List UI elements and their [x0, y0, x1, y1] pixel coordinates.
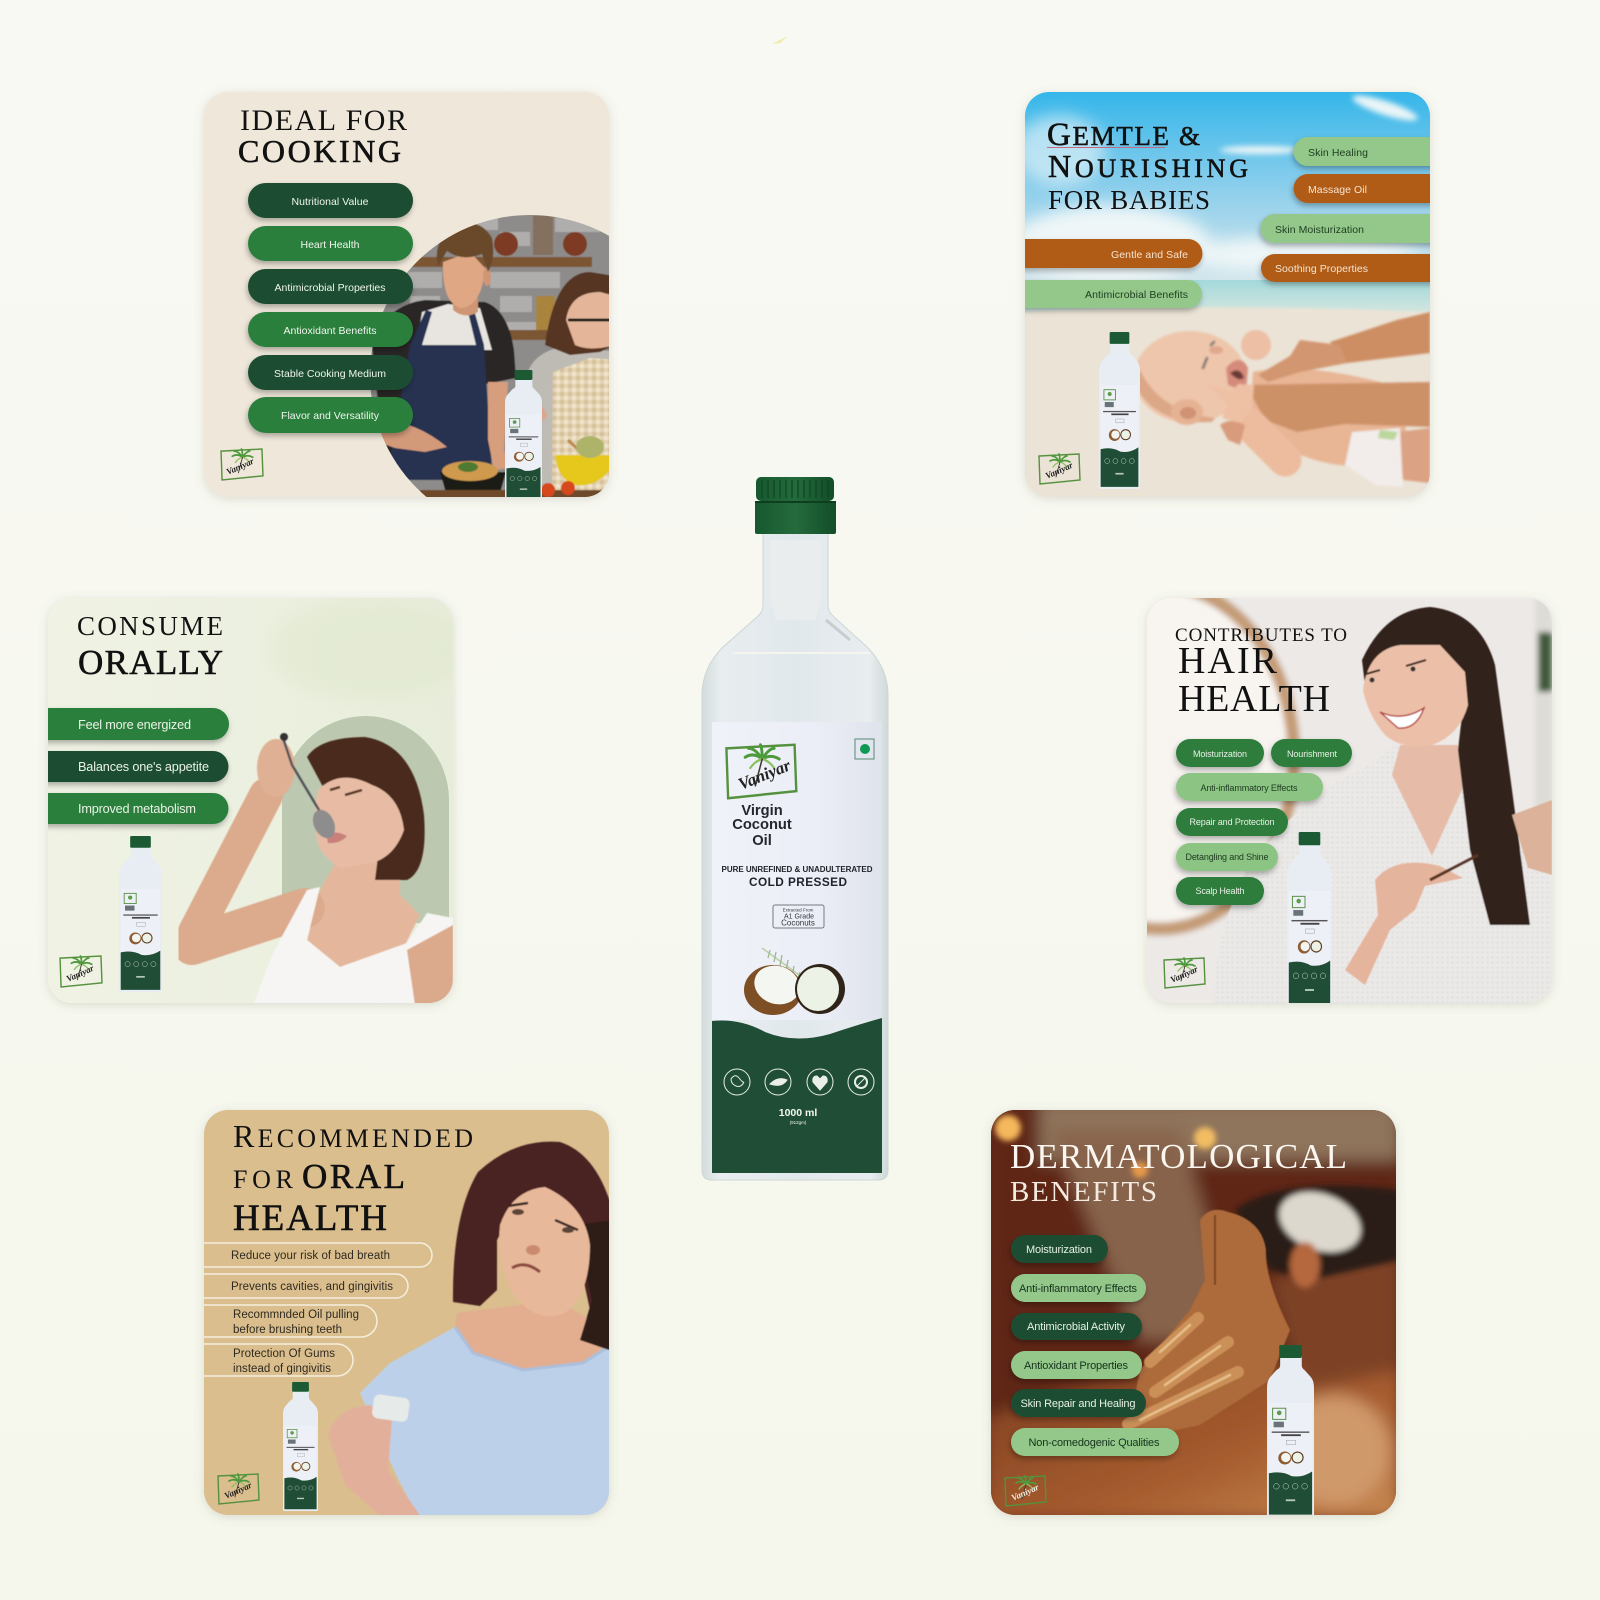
heading: HEALTH: [233, 1198, 387, 1239]
benefit pills: [38, 708, 229, 824]
panel: dermatological benefits: [985, 1100, 1405, 1520]
benefit pills: Stable Cooking Medium: [274, 368, 386, 380]
heading: [78, 617, 222, 674]
heading: HAIR: [1178, 640, 1278, 682]
panel: contributes to hair health: [1144, 597, 1555, 1008]
outlined benefit pills: [200, 1243, 432, 1376]
benefit pills: Soothing Properties: [1275, 263, 1368, 275]
panel: consume orally: [38, 598, 470, 1005]
heading: FOR: [233, 1165, 294, 1194]
benefit pills: Skin Moisturization: [1275, 224, 1364, 236]
heading: [1176, 628, 1346, 711]
logo: Vaniyar: [1169, 964, 1200, 985]
heading: [239, 110, 407, 162]
logo: Vaniyar: [223, 1480, 254, 1501]
benefit pills: Nourishment: [1287, 749, 1337, 759]
benefit pills: Anti-inflammatory Effects: [1200, 783, 1298, 793]
heading: HEALTH: [1178, 678, 1330, 720]
mini bottle: [1267, 1345, 1314, 1517]
heading: DERMATOLOGICAL: [1010, 1137, 1347, 1176]
bottle cap: [755, 477, 836, 534]
benefit pills: Detangling and Shine: [1186, 852, 1268, 862]
photo: woman combing hair: [1147, 598, 1552, 1003]
benefit pills: Scalp Health: [1196, 886, 1244, 896]
benefit pills: Antimicrobial Properties: [274, 282, 386, 294]
product claim: PURE UNREFINED & UNADULTERATED: [722, 865, 873, 874]
benefit pills: Skin Repair and Healing: [1020, 1398, 1136, 1410]
photo: couple cooking in kitchen: [370, 215, 609, 497]
heading: ORAL: [302, 1157, 405, 1196]
volume: [779, 1107, 817, 1125]
outlined benefit pills: instead of gingivitis: [233, 1363, 331, 1375]
benefit pills: Anti-inflammatory Effects: [1019, 1283, 1138, 1295]
heading: [234, 1126, 472, 1230]
product name: Coconut: [732, 817, 792, 833]
panel: gentle and nourishing for babies: [1010, 91, 1440, 500]
outlined benefit pills: Reduce your risk of bad breath: [231, 1250, 390, 1262]
veg mark: [855, 739, 874, 759]
illustration: woman tasting from a spoon: [192, 600, 470, 1005]
heading: CONSUME: [77, 611, 223, 641]
heading: [1010, 1137, 1347, 1208]
product name: Oil: [752, 833, 772, 849]
logo: [218, 1474, 259, 1504]
benefit pills: Skin Healing: [1308, 147, 1368, 159]
volume: 1000 ml: [779, 1107, 817, 1119]
photo: oil massage on back: [985, 1100, 1405, 1520]
benefit icons: [724, 1069, 874, 1095]
mini bottle: [1099, 332, 1140, 489]
photo: beach and baby massage: [1010, 91, 1430, 500]
heading: RECOMMENDED: [233, 1118, 473, 1154]
benefit pills: [1176, 739, 1352, 905]
heading: IDEAL FOR: [240, 104, 407, 137]
logo: [221, 449, 263, 480]
heading: GEMTLE &: [1047, 117, 1200, 153]
logo: Vaniyar: [65, 963, 96, 984]
benefit pills: Moisturization: [1026, 1244, 1092, 1256]
grade badge: [773, 905, 824, 928]
mini bottle: [505, 370, 542, 502]
benefit pills: Feel more energized: [78, 718, 191, 732]
benefit pills: Nutritional Value: [292, 196, 369, 208]
brand logo: [726, 745, 796, 798]
benefit pills: Antioxidant Benefits: [284, 325, 376, 337]
grade badge: A1 Grade: [784, 914, 814, 920]
logo: Vaniyar: [1010, 1482, 1041, 1503]
heading: BENEFITS: [1010, 1176, 1157, 1208]
benefit pills: Balances one's appetite: [78, 760, 209, 774]
outlined benefit pills: Prevents cavities, and gingivitis: [231, 1281, 393, 1293]
logo: [1039, 454, 1080, 484]
product name: [732, 803, 792, 849]
heading: FOR BABIES: [1048, 185, 1210, 215]
benefit pills: Moisturization: [1193, 749, 1247, 759]
outlined benefit pills: Recommnded Oil pulling: [233, 1309, 359, 1321]
heading: CONTRIBUTES TO: [1175, 625, 1347, 646]
panel: ideal for cooking: [204, 92, 620, 505]
product claim: COLD PRESSED: [749, 875, 847, 889]
main product bottle: [702, 477, 888, 1180]
logo: [60, 956, 102, 987]
benefit pills: [1011, 1235, 1179, 1456]
benefit pills: Antimicrobial Benefits: [1085, 289, 1188, 301]
product name: Virgin: [741, 803, 783, 819]
benefit pills: Heart Health: [300, 239, 360, 251]
logo: [1005, 1476, 1046, 1506]
logo: [1164, 958, 1205, 988]
mini bottle: [119, 836, 162, 992]
benefit pills: [1015, 137, 1440, 308]
green label base: [712, 1018, 882, 1173]
heading: [1047, 123, 1248, 210]
mini bottle: [283, 1382, 318, 1511]
product claim: [722, 865, 873, 889]
grade badge: Coconuts: [781, 918, 815, 928]
photo: woman oil pulling: [328, 1142, 615, 1520]
brand logo: Vaniyar: [735, 755, 794, 794]
heading: NOURISHING: [1048, 148, 1248, 184]
heading: COOKING: [238, 133, 401, 169]
outlined benefit pills: Protection Of Gums: [233, 1348, 335, 1360]
grade badge: Extracted From: [783, 908, 814, 912]
logo: Vaniyar: [1044, 460, 1075, 481]
logo: Vaniyar: [225, 456, 256, 477]
benefit pills: Gentle and Safe: [1111, 249, 1188, 261]
mini bottle: [1287, 832, 1332, 1007]
benefit pills: Massage Oil: [1308, 184, 1367, 196]
benefit pills: Non-comedogenic Qualities: [1028, 1437, 1160, 1449]
coconut illustration: [744, 948, 845, 1015]
benefit pills: [248, 183, 413, 433]
bottle glass: [702, 532, 888, 1180]
heading: ORALLY: [78, 643, 223, 682]
label: [712, 722, 882, 1020]
benefit pills: Improved metabolism: [78, 802, 196, 816]
benefit pills: Antimicrobial Activity: [1027, 1321, 1126, 1333]
volume: (912gm): [790, 1120, 807, 1125]
benefit pills: Flavor and Versatility: [281, 410, 380, 422]
panel: recommended for oral health: [200, 1110, 615, 1520]
benefit pills: Repair and Protection: [1190, 817, 1274, 827]
benefit pills: Antioxidant Properties: [1024, 1360, 1128, 1372]
outlined benefit pills: before brushing teeth: [233, 1324, 342, 1336]
